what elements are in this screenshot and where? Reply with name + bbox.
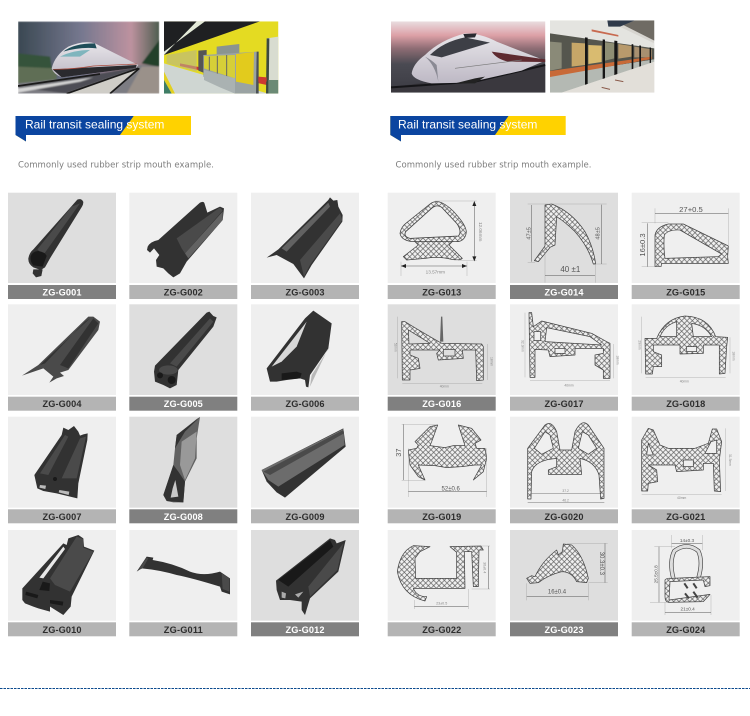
tile ZG-G014 [510,193,618,299]
caption: ZG-G009 [286,512,324,522]
cross-section drawing: 52mm [393,343,397,352]
profile photo [137,557,230,594]
photo: platform screen doors [550,20,654,93]
cross-section drawing: 30.3±0.3 [598,552,604,576]
tile ZG-G008 [129,417,237,523]
tile ZG-G021 [632,417,740,523]
cross-section drawing [528,423,604,503]
cross-section drawing [397,546,490,609]
cross-section drawing: 18mm [615,355,619,365]
caption: ZG-G022 [422,625,461,635]
tile ZG-G006 [251,304,359,411]
cross-section drawing: 40mm [677,496,687,500]
profile photo [147,202,224,277]
cross-section drawing: 40mm [440,384,449,388]
cross-section drawing: 12.06mm [478,222,483,241]
cross-section drawing: 47±5 [527,227,533,240]
profile photo [163,417,200,502]
caption: ZG-G014 [544,288,584,298]
caption: ZG-G006 [286,399,324,409]
tile ZG-G004 [8,304,116,411]
subheading right: Commonly used rubber strip mouth example. [396,160,592,170]
caption: ZG-G019 [422,512,461,522]
cross-section drawing [527,543,608,600]
cross-section drawing: 13.57mm [426,269,445,274]
caption: ZG-G003 [286,288,324,298]
tile ZG-G022 [388,530,496,636]
cross-section drawing [394,424,487,497]
tile ZG-G013 [388,193,496,299]
tile ZG-G005 [129,304,237,411]
caption: ZG-G007 [42,512,82,522]
cross-section drawing: 18mm [489,357,493,367]
cross-section drawing: 40mm [680,380,689,384]
cross-section drawing [393,317,493,388]
photo: yellow metro at platform [164,21,278,94]
profile photo [154,312,217,388]
profile photo [22,317,100,383]
section banner left [16,116,191,142]
caption: ZG-G005 [164,399,203,409]
tile ZG-G023 [510,530,618,636]
profile photo [276,538,346,615]
profile photo [22,535,94,615]
cross-section drawing [638,205,728,267]
tile ZG-G011 [129,530,237,636]
cross-section drawing: 14±0.3 [680,538,695,543]
caption: ZG-G018 [666,399,705,409]
cross-section drawing: 40mm [564,383,574,387]
tile ZG-G010 [8,530,116,636]
cross-section drawing: 25.5±0.8 [654,565,659,583]
caption: ZG-G015 [666,288,705,298]
cross-section drawing [527,204,607,283]
section banner right [390,116,566,142]
tile ZG-G015 [632,193,740,299]
caption: ZG-G004 [42,399,82,409]
caption: ZG-G017 [544,399,584,409]
caption: ZG-G013 [422,288,461,298]
tile ZG-G001 [8,193,116,299]
caption: ZG-G016 [422,399,461,409]
tile ZG-G007 [8,417,116,523]
section banner left: Rail transit sealing system [25,118,164,132]
cross-section drawing [650,535,711,615]
photo: white bullet train [391,21,545,93]
tile ZG-G012 [251,530,359,636]
cross-section drawing: 36±0.4 [483,562,487,573]
cross-section drawing: 31.5mm [728,454,732,466]
caption: ZG-G008 [164,512,203,522]
tile ZG-G016 [388,304,496,411]
caption: ZG-G023 [544,625,584,635]
cross-section drawing [521,313,619,387]
profile photo [267,197,343,278]
caption: ZG-G002 [164,288,203,298]
cross-section drawing [637,316,736,384]
cross-section drawing: 29mm [637,340,641,350]
cross-section drawing [642,428,732,500]
tile ZG-G018 [632,304,740,411]
cross-section drawing: 48±5 [596,227,602,240]
profile photo [267,311,332,387]
caption: ZG-G010 [42,625,82,635]
cross-section drawing: 40 ±1 [560,265,581,274]
caption: ZG-G021 [666,512,705,522]
cross-section drawing: 32.3mm [521,340,525,352]
tile ZG-G024 [632,530,740,636]
cross-section drawing: 46.2 [562,498,569,502]
tile ZG-G020 [510,417,618,523]
cross-section drawing: 16±0.4 [548,590,567,596]
cross-section drawing: 23±0.5 [436,602,447,606]
photo: high-speed train with motion blur [18,21,159,94]
cross-section drawing: 21±0.4 [681,606,695,611]
cross-section drawing: 37 [394,449,403,457]
tile ZG-G019 [388,417,496,523]
caption: ZG-G012 [286,625,324,635]
cross-section drawing [400,201,483,276]
cross-section drawing: 37.2 [562,489,569,493]
caption: ZG-G020 [544,512,584,522]
cross-section drawing: 52±0.6 [442,487,460,493]
profile photo [28,199,83,277]
caption: ZG-G001 [42,288,82,298]
tile ZG-G002 [129,193,237,299]
subheading left: Commonly used rubber strip mouth example. [18,160,214,170]
tile ZG-G003 [251,193,359,299]
profile photo [34,426,88,498]
section banner right: Rail transit sealing system [398,118,537,132]
tile ZG-G017 [510,304,619,411]
cross-section drawing: 16±0.3 [638,233,647,257]
caption: ZG-G024 [666,625,706,635]
cross-section drawing: 27+0.5 [679,205,703,214]
profile photo [262,428,346,498]
tile ZG-G009 [251,417,359,523]
caption: ZG-G011 [164,625,203,635]
cross-section drawing: 18mm [732,351,736,361]
